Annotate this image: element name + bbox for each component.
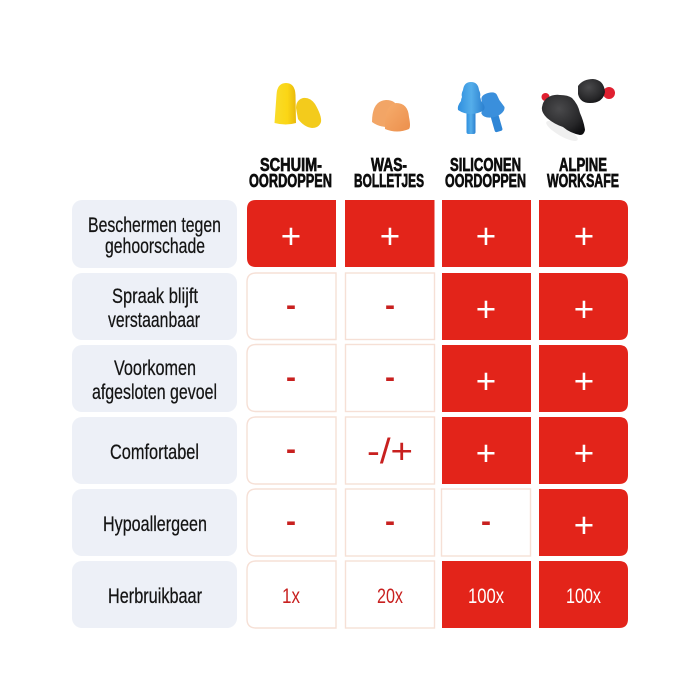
cell: siliconen minus bbox=[442, 489, 530, 556]
cell: alpine plus bbox=[539, 200, 628, 267]
cell: siliconen 100x: 100x bbox=[468, 584, 504, 608]
heading: siliconen oordoppen bbox=[445, 155, 526, 191]
cell: alpine plus bbox=[539, 273, 628, 340]
cell: schuim minus: - bbox=[286, 505, 296, 538]
icon: yellow foam earplugs bbox=[274, 83, 321, 128]
heading: siliconen oordoppen: OORDOPPEN bbox=[445, 171, 526, 191]
heading: siliconen oordoppen: SILICONEN bbox=[450, 155, 521, 175]
cell: was minus: - bbox=[385, 289, 395, 322]
cell: alpine plus: + bbox=[574, 290, 594, 329]
cell: siliconen plus bbox=[442, 200, 531, 267]
cell: siliconen plus: + bbox=[476, 217, 496, 256]
cell: schuim 1x bbox=[247, 561, 336, 628]
heading: wasbolletjes: BOLLETJES bbox=[354, 171, 424, 191]
icon: blue silicone earplugs bbox=[458, 82, 511, 135]
row: Voorkomen afgesloten gevoel bbox=[72, 344, 628, 412]
heading: schuimoordoppen: OORDOPPEN bbox=[249, 171, 332, 191]
label: Spraak blijft verstaanbaar bbox=[72, 273, 237, 340]
row: Hypoallergeen bbox=[72, 489, 628, 556]
cell: was plus bbox=[345, 200, 434, 267]
cell: alpine plus: + bbox=[574, 362, 594, 401]
cell: schuim minus bbox=[247, 273, 336, 340]
cell: siliconen plus: + bbox=[476, 290, 496, 329]
cell: alpine plus: + bbox=[574, 434, 594, 473]
heading: alpine worksafe: ALPINE bbox=[559, 155, 607, 175]
label: Voorkomen afgesloten gevoel: Voorkomen bbox=[114, 357, 196, 380]
cell: alpine plus: + bbox=[574, 506, 594, 545]
cell: siliconen plus bbox=[442, 273, 531, 340]
cell: schuim minus bbox=[247, 489, 336, 556]
cell: schuim 1x: 1x bbox=[282, 584, 300, 608]
cell: schuim plus: + bbox=[281, 217, 301, 256]
cell: schuim minus bbox=[247, 417, 336, 484]
cell: alpine plus bbox=[539, 345, 628, 412]
cell: was minus bbox=[346, 489, 434, 556]
cell: was minus bbox=[346, 344, 434, 412]
heading: wasbolletjes: WAS- bbox=[371, 155, 407, 175]
label: Hypoallergeen: Hypoallergeen bbox=[103, 513, 207, 536]
label: Voorkomen afgesloten gevoel bbox=[72, 345, 237, 412]
cell: schuim minus bbox=[247, 344, 336, 412]
cell: siliconen plus bbox=[442, 417, 531, 484]
cell: schuim plus bbox=[247, 200, 336, 267]
label: Spraak blijft verstaanbaar: Spraak blijft bbox=[112, 285, 198, 308]
label: Herbruikbaar bbox=[72, 561, 237, 628]
label: Spraak blijft verstaanbaar: verstaanbaar bbox=[108, 309, 200, 332]
cell: siliconen minus: - bbox=[481, 505, 491, 538]
cell: schuim minus: - bbox=[286, 433, 296, 466]
row: Beschermen tegen gehoorschade bbox=[72, 200, 628, 268]
label: Comfortabel bbox=[72, 417, 237, 484]
cell: siliconen 100x bbox=[442, 561, 531, 628]
cell: siliconen plus: + bbox=[476, 434, 496, 473]
label: Hypoallergeen bbox=[72, 489, 237, 556]
cell: siliconen plus: + bbox=[476, 362, 496, 401]
cell: was minus/plus bbox=[346, 417, 434, 484]
row: Herbruikbaar bbox=[72, 561, 628, 628]
heading: wasbolletjes bbox=[354, 155, 424, 191]
cell: alpine plus bbox=[539, 417, 628, 484]
label: Beschermen tegen gehoorschade: Beschermen tegen bbox=[88, 214, 221, 237]
cell: schuim minus: - bbox=[286, 361, 296, 394]
cell: was minus bbox=[346, 273, 434, 340]
row: Spraak blijft verstaanbaar bbox=[72, 273, 628, 340]
cell: was minus: - bbox=[385, 361, 395, 394]
cell: alpine 100x: 100x bbox=[566, 584, 601, 608]
heading: schuimoordoppen: SCHUIM- bbox=[260, 155, 322, 175]
cell: alpine 100x bbox=[539, 561, 628, 628]
heading: alpine worksafe bbox=[547, 155, 619, 191]
label: Voorkomen afgesloten gevoel: afgesloten gevoel bbox=[92, 381, 217, 404]
cell: alpine plus: + bbox=[574, 217, 594, 256]
label: Comfortabel: Comfortabel bbox=[110, 441, 199, 464]
icon: orange wax balls bbox=[372, 100, 410, 132]
cell: was minus: - bbox=[385, 505, 395, 538]
cell: siliconen plus bbox=[442, 345, 531, 412]
cell: was minus/plus: -/+ bbox=[367, 432, 413, 471]
cell: alpine plus bbox=[539, 489, 628, 556]
cell: was 20x bbox=[346, 561, 434, 628]
cell: was 20x: 20x bbox=[377, 584, 403, 608]
heading: schuimoordoppen bbox=[249, 155, 332, 191]
cell: was plus: + bbox=[380, 217, 400, 256]
cell: schuim minus: - bbox=[286, 289, 296, 322]
label: Beschermen tegen gehoorschade bbox=[72, 200, 237, 268]
row: Comfortabel bbox=[72, 417, 628, 484]
icon: Alpine Worksafe black earplugs bbox=[542, 79, 615, 144]
heading: alpine worksafe: WORKSAFE bbox=[547, 171, 619, 191]
label: Beschermen tegen gehoorschade: gehoorschade bbox=[105, 235, 205, 258]
label: Herbruikbaar: Herbruikbaar bbox=[108, 585, 202, 608]
